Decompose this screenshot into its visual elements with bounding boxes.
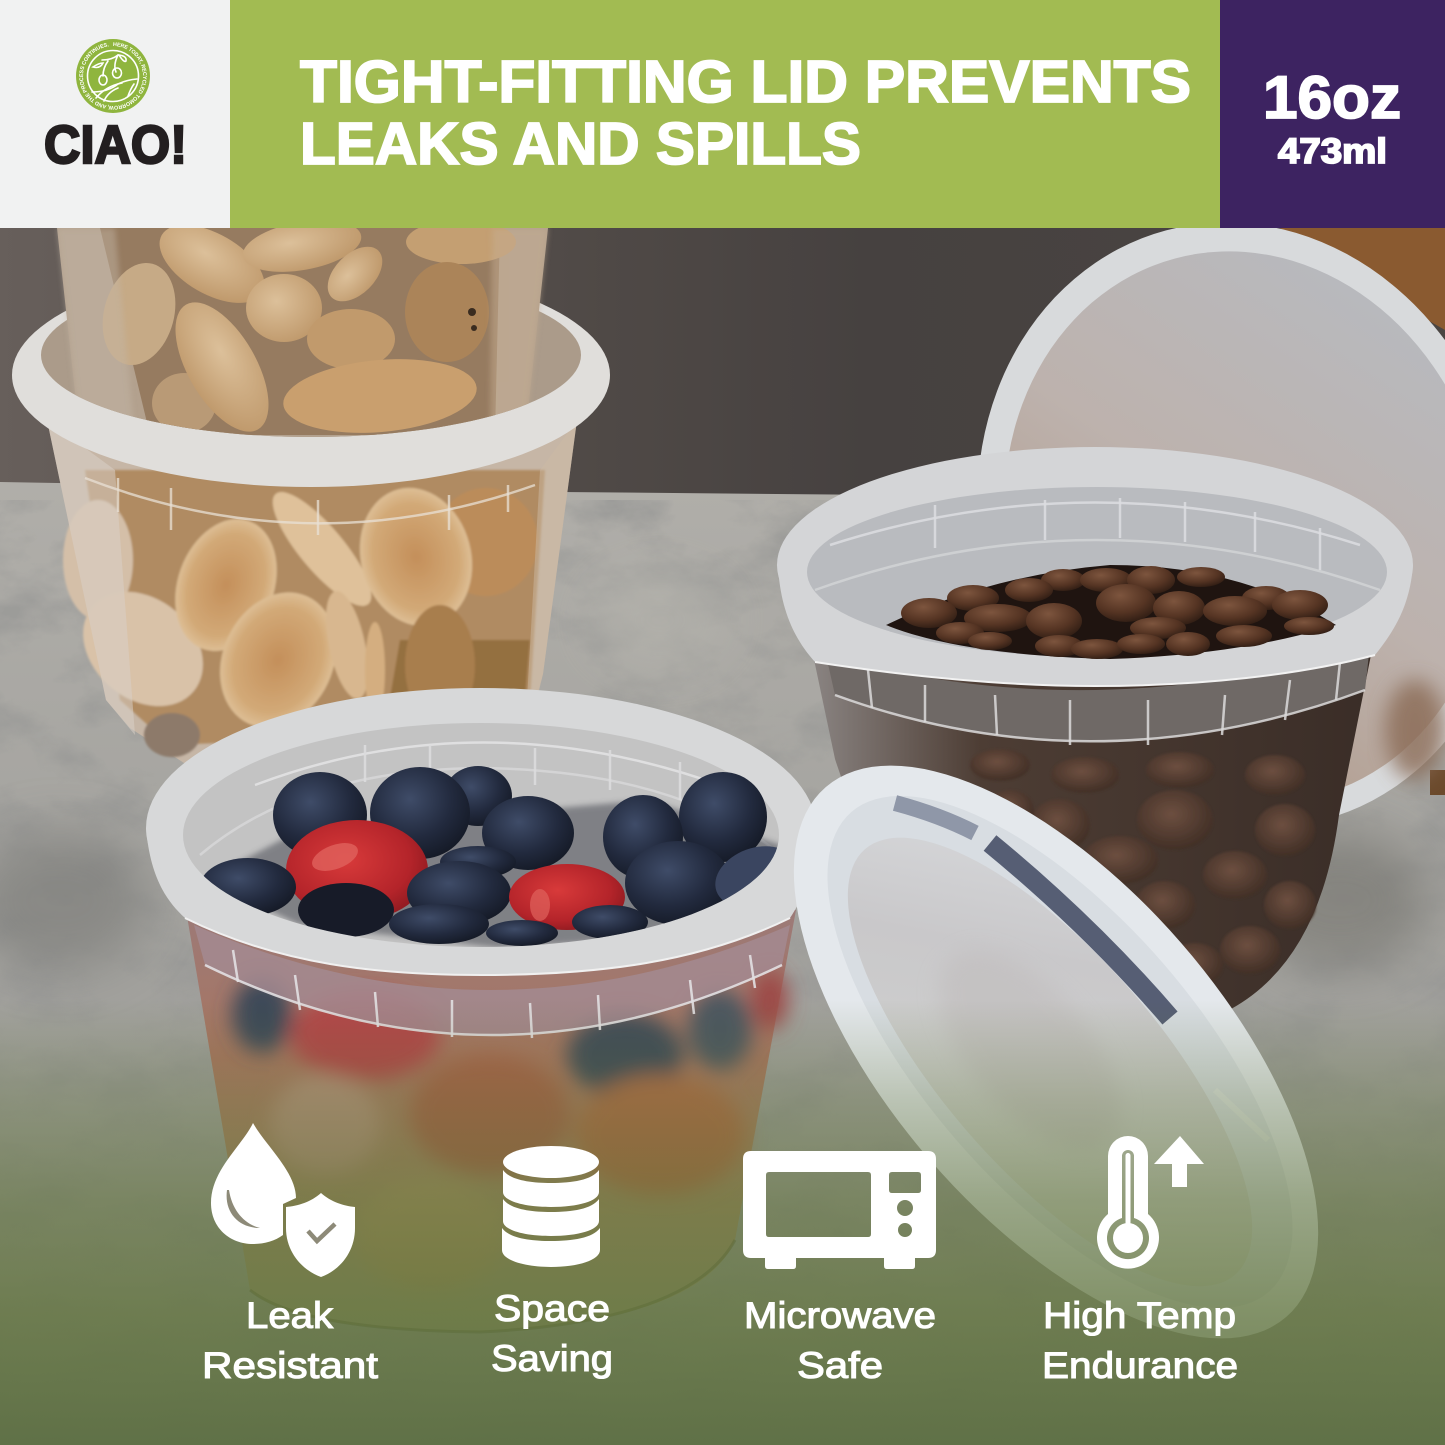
wall backdrop [0, 228, 1445, 503]
label: microwave safe: Safe [797, 1345, 883, 1386]
label: space saving [491, 1288, 613, 1379]
coffee container rim and interior [777, 447, 1413, 745]
front container base edge [250, 1240, 735, 1332]
panel: logo [0, 0, 230, 228]
headline text: LEAKS AND SPILLS [300, 111, 861, 177]
size text [1263, 64, 1401, 171]
label: leak resistant: Resistant [202, 1345, 379, 1386]
headline text [300, 49, 1191, 177]
feature: leak resistant [202, 1123, 379, 1386]
label: leak resistant: Leak [246, 1295, 334, 1336]
coffee beans on top [886, 565, 1336, 659]
blueberries and tomatoes [200, 766, 805, 948]
front container body [186, 910, 796, 1332]
logo wordmark: CIAO! [44, 115, 187, 175]
peanut container lower body [47, 420, 577, 772]
coffee beans seen through the wall [970, 749, 1316, 987]
stone counter [0, 482, 1445, 1445]
fruit seen through the wall [232, 970, 788, 1290]
label: high temp endurance: High Temp [1043, 1295, 1236, 1336]
panel: headline [230, 0, 1220, 228]
icon: thermometer with up arrow [1097, 1136, 1204, 1269]
panel: size [1220, 0, 1445, 228]
peanut container upper with peanuts [55, 228, 550, 437]
label: high temp endurance: Endurance [1042, 1345, 1238, 1386]
feature: high temp endurance [1042, 1136, 1238, 1386]
feature: space saving [491, 1146, 613, 1379]
header band [0, 0, 1445, 228]
logo badge: HERE TODAY, RECYCLED TOMORROW, AND THE PROCESS CONTINUES. [79, 42, 147, 110]
size text: 16oz [1263, 64, 1401, 131]
label: leak resistant [202, 1295, 379, 1386]
rear lid leaning on coffee container [910, 162, 1445, 888]
icon: microwave [743, 1151, 936, 1269]
wood edge lower right [1430, 770, 1445, 795]
clear lid in foreground [700, 678, 1412, 1426]
icon: water drop with shield [211, 1123, 355, 1277]
label: microwave safe: Microwave [744, 1295, 936, 1336]
size text: 473ml [1278, 132, 1387, 171]
dark band seen through lid [895, 803, 975, 833]
label: space saving: Space [494, 1288, 610, 1329]
headline text: TIGHT-FITTING LID PREVENTS [300, 49, 1191, 115]
front container rim and interior [146, 688, 816, 1038]
label: space saving: Saving [491, 1338, 613, 1379]
green fade overlay [0, 1000, 1445, 1445]
feature: microwave safe [743, 1151, 936, 1386]
label: high temp endurance [1042, 1295, 1238, 1386]
icon: stacked cylinders [502, 1146, 600, 1267]
peanut container rim [12, 263, 610, 487]
peanut container inner shadow [41, 273, 581, 437]
label: microwave safe [744, 1295, 936, 1386]
counter stone texture [0, 500, 1445, 1445]
counter mottling [0, 570, 1430, 970]
coffee container body [812, 645, 1373, 1009]
wooden board [1280, 228, 1445, 330]
